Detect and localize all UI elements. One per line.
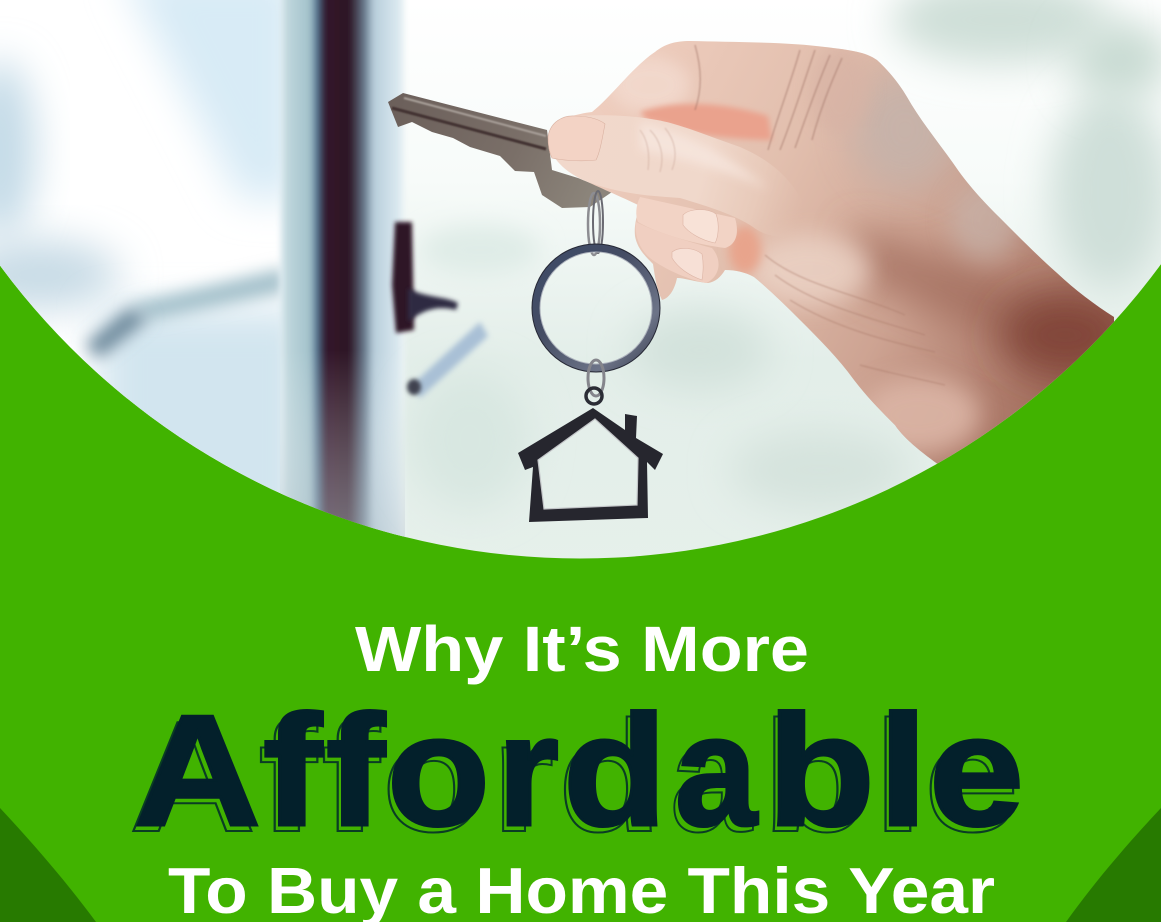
title: line 1: Why It’s More <box>355 613 809 685</box>
title: Affordable with outlined offset shadow: A <box>134 683 261 859</box>
title: Affordable with outlined offset shadow: r <box>497 683 559 859</box>
house keychain <box>518 408 663 522</box>
small split ring <box>588 191 603 255</box>
title: Affordable with outlined offset shadow: l <box>873 689 923 865</box>
title: Affordable with outlined offset shadow: a <box>675 683 758 859</box>
title: Affordable with outlined offset shadow: f <box>326 683 385 859</box>
title: Affordable with outlined offset shadow: e <box>929 683 1024 859</box>
title: Affordable with outlined offset shadow: f <box>258 689 317 865</box>
title: Affordable with outlined offset shadow: a <box>670 689 753 865</box>
title: Affordable with outlined offset shadow: l <box>878 683 928 859</box>
blurred door handle <box>392 222 488 398</box>
title: Affordable with outlined offset shadow: b <box>762 689 870 865</box>
title: Affordable with outlined offset shadow: d <box>558 689 662 865</box>
ring finger <box>636 222 719 283</box>
key <box>388 93 612 208</box>
title: Affordable with outlined offset shadow: r <box>492 689 554 865</box>
dark green corner: bottom right <box>1066 808 1161 922</box>
title: Affordable with outlined offset shadow: A <box>129 689 256 865</box>
hand <box>548 41 1130 470</box>
photo: hand holding house key in front of a window <box>0 0 1161 600</box>
title: Affordable with outlined offset shadow: o <box>387 683 490 859</box>
middle fingernail <box>683 210 718 243</box>
title: Affordable with outlined offset shadow <box>129 683 1024 865</box>
title: Affordable with outlined offset shadow: f <box>263 683 322 859</box>
hand shading <box>610 45 1130 453</box>
thumb <box>556 116 774 232</box>
ring fingernail <box>672 248 703 280</box>
title: Affordable with outlined offset shadow: b <box>767 683 875 859</box>
key ring <box>532 244 660 372</box>
lower split ring <box>586 360 604 404</box>
title: Affordable with outlined offset shadow: o <box>382 689 485 865</box>
dark green corner: bottom left <box>0 808 96 922</box>
title: Affordable with outlined offset shadow: d <box>563 683 667 859</box>
thumbnail <box>548 116 605 161</box>
right background clouds <box>890 0 1110 65</box>
title: Affordable with outlined offset shadow: f <box>321 689 380 865</box>
window frame <box>280 0 405 570</box>
middle finger <box>636 197 737 248</box>
blurred window background <box>0 0 1161 600</box>
title: Affordable with outlined offset shadow: e <box>924 689 1019 865</box>
left pane <box>0 181 290 498</box>
